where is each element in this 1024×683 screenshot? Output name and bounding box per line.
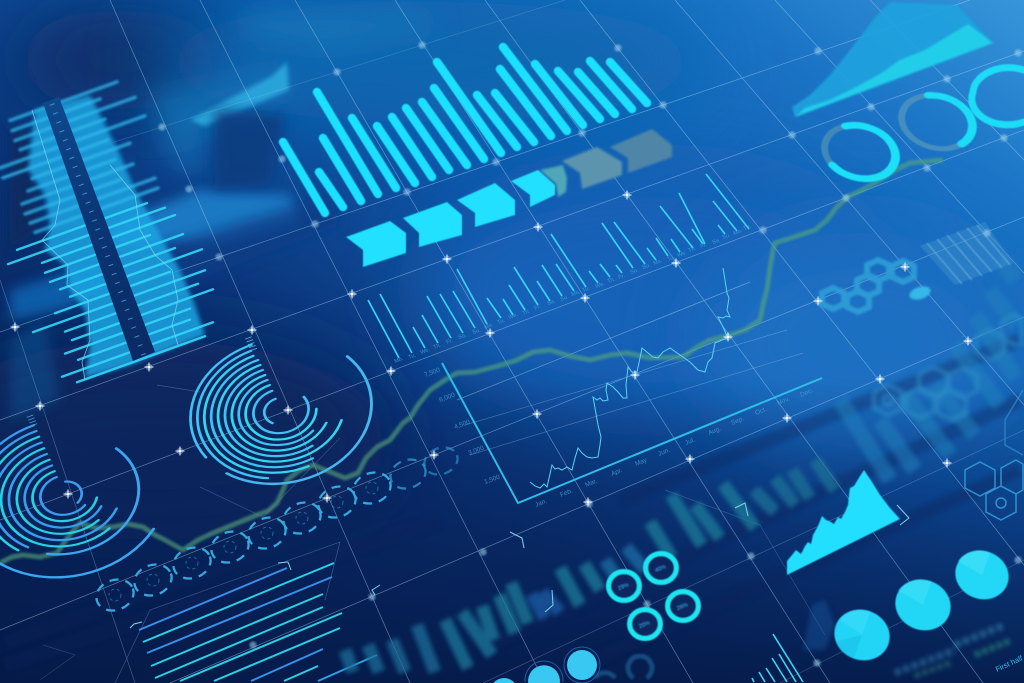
day labels: Th. [688,245,698,254]
day labels: Sa. [547,298,557,307]
day labels: We. [595,281,606,290]
month labels: Dec. [799,387,814,399]
day labels: Tu. [497,317,506,326]
day labels [394,223,752,365]
step 2 [403,202,462,247]
gauge: centre [129,283,433,539]
pie 1 [827,602,897,668]
y axis labels: 1,500 [483,474,501,486]
day labels: Mo. [571,289,582,298]
line chart axes [442,363,822,503]
blurred data table bottom right [803,600,1012,676]
month labels: May [634,456,649,468]
day labels: Fr. [618,273,626,281]
y axis labels: 3,000 [467,445,485,457]
y axis labels: 6,000 [438,392,456,404]
day labels: We. [508,312,519,321]
day labels: We. [677,250,688,259]
gauge: left [0,341,248,649]
day labels: Su. [472,327,482,336]
small cyan markers [130,503,909,628]
day labels: Tu. [582,285,591,294]
thin bars [368,174,749,358]
right blurred bars [840,260,1016,480]
y axis labels [423,367,501,486]
day labels: Mo. [394,356,405,365]
month labels: Jun. [657,447,671,458]
month labels: Apr. [610,467,624,478]
day labels: We. [420,347,431,356]
hatched block [920,222,1013,285]
day labels: Sa. [458,332,468,341]
cyan area chart [787,470,900,575]
step 1 [346,221,406,267]
month labels [534,387,814,509]
chain of dashed circles [92,443,461,616]
day labels: Mo. [653,258,664,267]
month labels: Oct. [754,406,768,417]
month labels: Feb. [559,487,574,499]
large pie charts [827,543,1016,668]
hexagon cluster right [874,315,1022,420]
faint rings [595,656,652,678]
small pie 2 [525,661,563,683]
hexagon chain [822,260,932,312]
step 4 [511,170,555,207]
spine ticks [52,104,144,356]
histogram glow silhouette [28,95,205,378]
day labels: Su. [722,232,732,241]
histogram bars [0,82,213,382]
small bar lines bottom right [752,634,803,682]
green trend line [0,160,943,563]
y axis labels: 7,500 [423,367,441,379]
donut 29%: 29% [617,582,630,592]
histogram: silhouette with spine [0,82,213,382]
day labels: Sa. [630,267,640,276]
small pie 3 [493,678,515,683]
day labels: Mo. [733,228,744,237]
step 5 muted [540,165,567,197]
donut 40%: 40% [654,564,667,574]
day labels: Mo. [484,322,495,331]
donut 26%: 26% [676,602,689,612]
top-right area chart [792,2,993,117]
weekly thin bar chart [368,174,752,365]
day labels: Fr. [446,338,454,346]
pie 3 [948,543,1016,607]
pie 2 [888,572,958,638]
bottom-left line list [139,563,377,681]
day labels: Th. [433,342,443,351]
day labels: Th. [607,276,617,285]
arrow step bar [346,129,672,267]
progress rings top right [802,68,1024,200]
top cyan bar chart [283,47,647,213]
small pie charts [493,647,652,683]
line chart series [530,268,730,488]
day labels: Th. [522,308,532,317]
day labels: Su. [642,262,652,271]
month labels: Sep. [730,415,745,427]
donut 20%: 20% [638,620,651,630]
step 7 muted [610,129,672,173]
hexagon outlines lower right [965,390,1023,520]
day labels: Fr. [534,304,542,312]
four percentage donuts [608,554,698,638]
blurred world map backdrop [10,10,440,420]
blurred bottom bar chart [345,460,835,672]
day labels: Tu. [667,254,676,263]
step 6 muted [562,147,622,189]
small pie 1 [564,647,600,683]
month labels: Jan. [534,498,548,509]
day labels: Su. [560,294,570,303]
month labels: Aug. [707,425,722,437]
dark diagonal bands [5,340,1020,675]
first half label: First half [994,653,1024,674]
step 3 [457,183,515,227]
day labels: Tu. [408,352,417,361]
month labels: Nov. [776,395,791,407]
month labels: Mar. [584,478,599,489]
day labels: Fr. [700,242,708,250]
day labels: Tu. [743,223,752,232]
ring 1 [802,104,918,200]
histogram contour line [32,110,178,380]
day labels: Sa. [712,237,722,246]
ring 3 [972,68,1024,125]
y axis labels: 4,500 [453,419,471,431]
line chart [423,268,822,509]
ring 2 [882,76,992,168]
month labels: Jul. [684,437,696,447]
histogram central spine [43,97,155,361]
